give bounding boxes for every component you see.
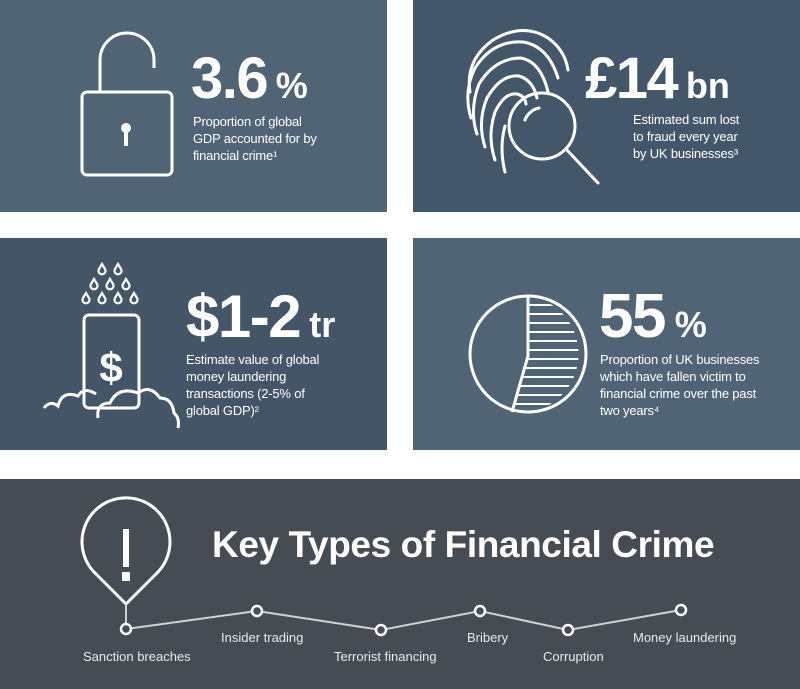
labels: [83, 630, 736, 664]
description: financial crime over the past: [600, 386, 756, 401]
description: Estimate value of global: [186, 352, 319, 367]
description: [193, 114, 317, 163]
description: to fraud every year: [633, 129, 738, 144]
description: Estimated sum lost: [633, 112, 739, 127]
labels: Corruption: [543, 649, 604, 664]
description: two years⁴: [600, 403, 659, 418]
labels: Bribery: [467, 630, 508, 645]
title: Key Types of Financial Crime: [212, 524, 714, 565]
description: by UK businesses³: [633, 146, 738, 161]
description: global GDP)²: [186, 403, 259, 418]
labels: Insider trading: [221, 630, 303, 645]
labels: Sanction breaches: [83, 649, 191, 664]
description: Proportion of UK businesses: [600, 352, 759, 367]
description: which have fallen victim to: [600, 369, 746, 384]
description: [600, 352, 759, 418]
description: [633, 112, 740, 161]
description: GDP accounted for by: [193, 131, 317, 146]
description: money laundering: [186, 369, 286, 384]
panel: £14bn fraud: [413, 0, 800, 212]
icon: exclamation pin and timeline: [80, 496, 688, 636]
icon: open padlock: [80, 32, 174, 176]
panel: 55% UK businesses: [413, 238, 800, 450]
icon: phone with dollar, drops and clouds: $: [99, 344, 123, 391]
panel: key types of financial crime: [0, 479, 800, 689]
stat: $1-2 tr: $1-2 tr: [186, 283, 335, 350]
description: financial crime¹: [193, 148, 277, 163]
description: [186, 352, 319, 418]
panel: 3.6% GDP: [0, 0, 387, 212]
labels: Money laundering: [633, 630, 736, 645]
icon: fingerprint with magnifier: [466, 29, 600, 185]
icon: pie chart: [468, 294, 588, 414]
description: Proportion of global: [193, 114, 302, 129]
labels: Terrorist financing: [334, 649, 437, 664]
stat: 3.6%: 3.6 %: [191, 46, 308, 111]
stat: 55%: 55 %: [599, 282, 707, 351]
icon: phone with dollar, drops and clouds: [42, 262, 180, 428]
panel: $1-2tr money laundering: [0, 238, 387, 450]
stat: £14 bn: £14 bn: [585, 46, 730, 111]
description: transactions (2-5% of: [186, 386, 305, 401]
